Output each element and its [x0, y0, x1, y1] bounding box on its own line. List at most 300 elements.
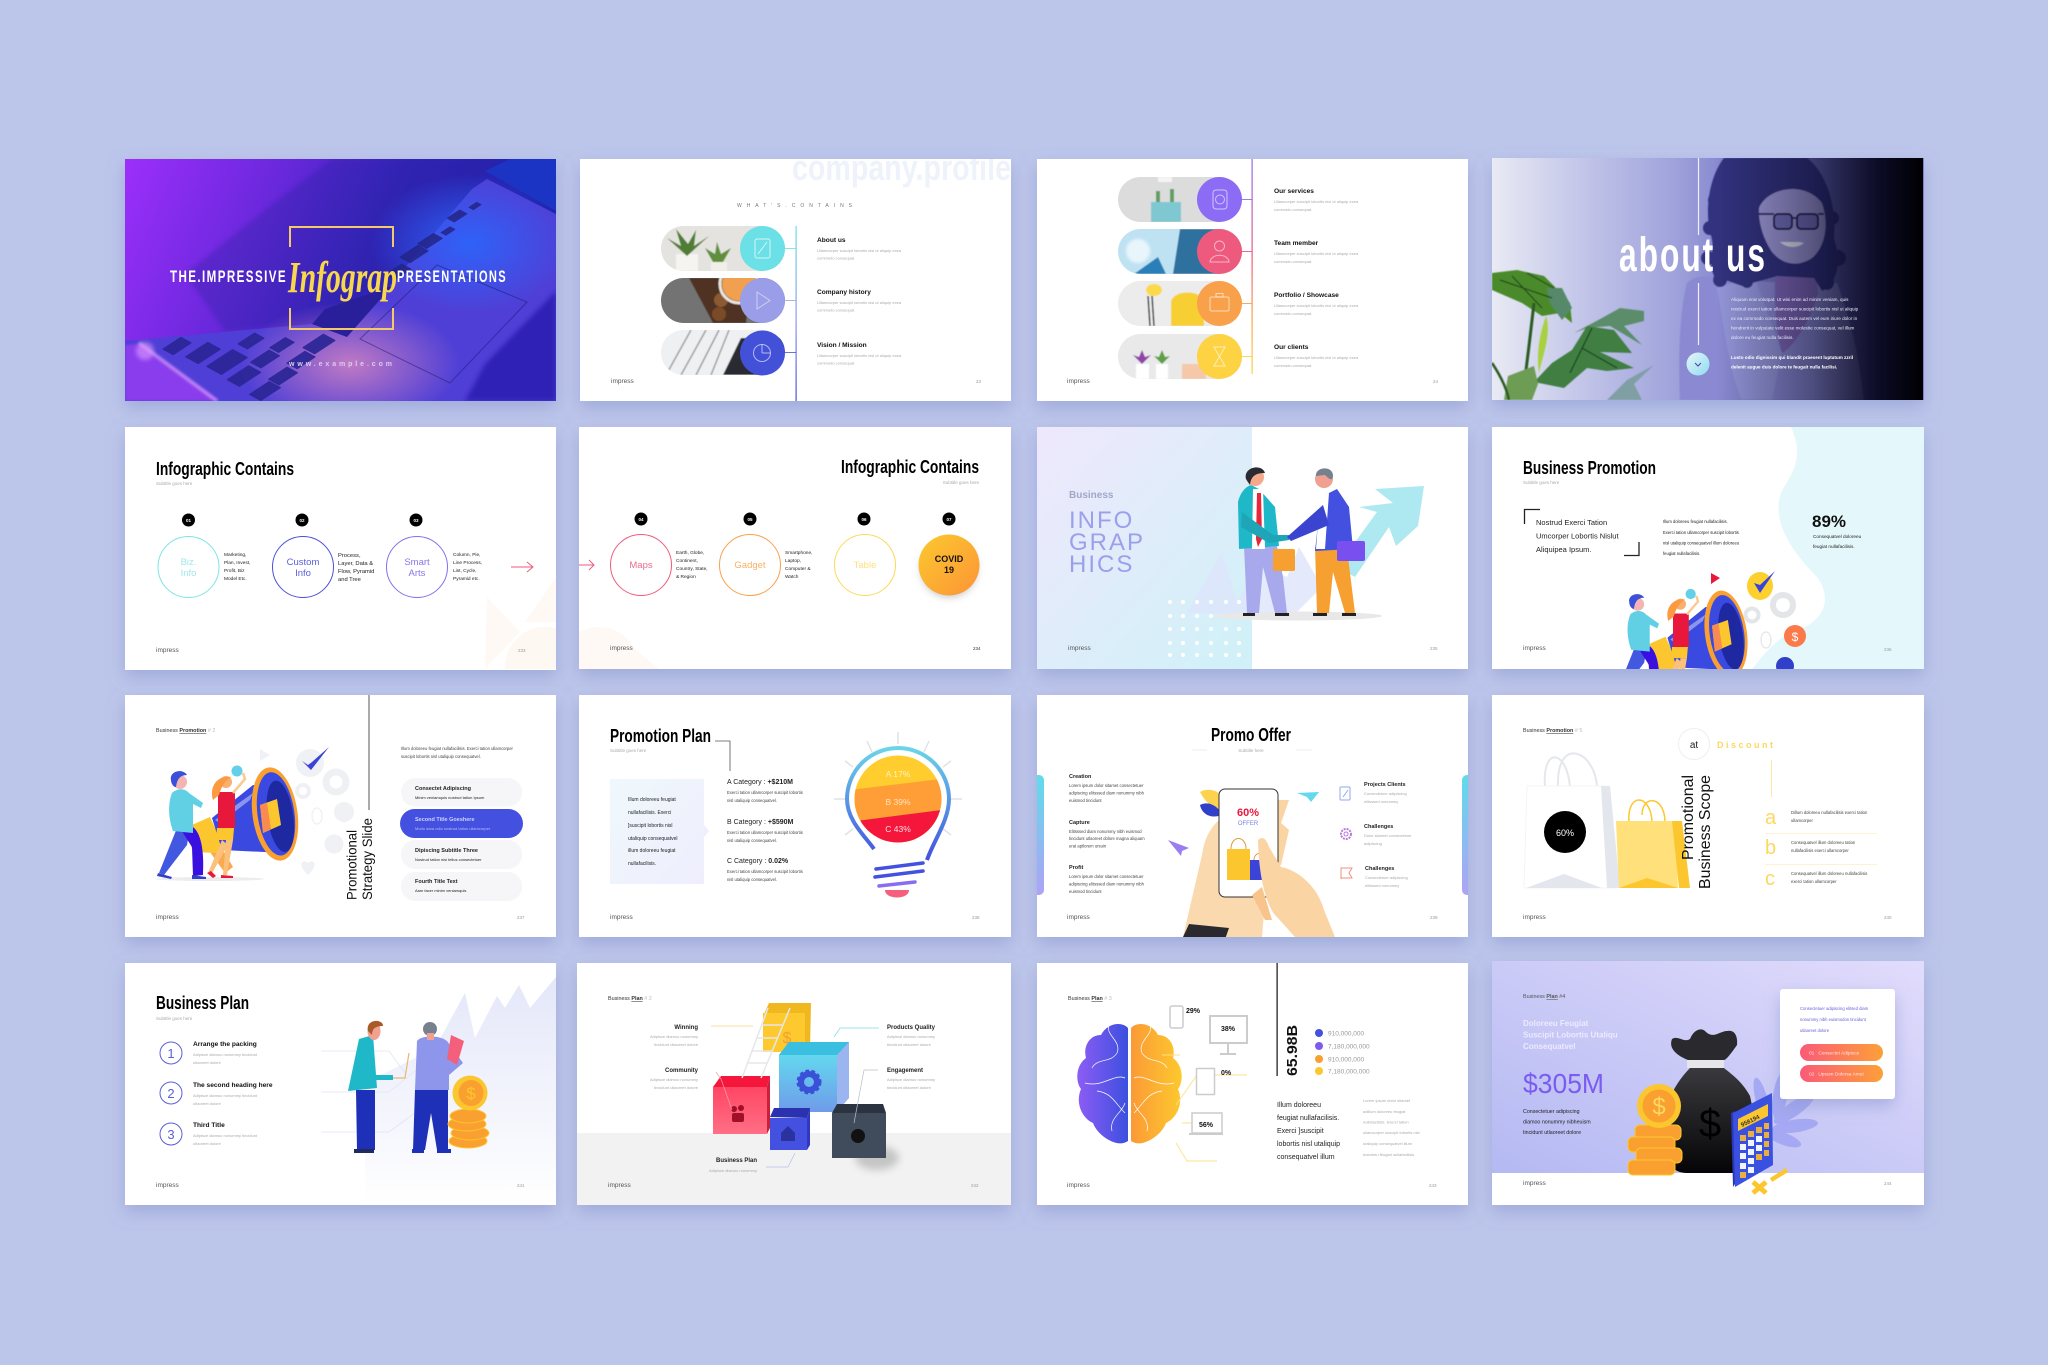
paragraph right: utaliquip consequatvel illum [1363, 1141, 1413, 1146]
cover url: www.example.com [288, 361, 392, 368]
step 06: Table [854, 560, 876, 571]
text box: Illum doloreeu feugiat [628, 797, 676, 803]
step 04 [610, 512, 708, 596]
label products quality: tincidunt utlaoreet dolore [887, 1042, 932, 1047]
step 2: Adipisce diamoo nonummy tincidunt [193, 1093, 258, 1098]
title: Infographic Contains [156, 459, 294, 479]
list items: commodo consequat. [1274, 311, 1312, 316]
paragraph right: nullafacilisis. Exerci tation [1363, 1120, 1409, 1124]
info card [1780, 989, 1895, 1099]
list items: Ullamcorper suscipit lobortis nisl ut aliquip exea [817, 248, 902, 253]
footer: 237 [517, 915, 525, 920]
categories: Exerci tation ullamcorper suscipit lobortis [727, 830, 803, 835]
label community [650, 1068, 699, 1090]
footer: impress [1523, 645, 1547, 652]
footer [156, 1182, 525, 1189]
option pill 3: Dipiscing Subtitle Three [415, 848, 478, 854]
text box: nullafacilisis. [628, 861, 656, 867]
abc list: Dillum doloreeu nullafacilisis exerci tation [1791, 810, 1868, 815]
subheading: Consequatvel [1523, 1042, 1575, 1051]
left list [1069, 774, 1145, 894]
abc list: b [1765, 837, 1776, 859]
illustration: blocks [713, 1003, 899, 1170]
footer: 24 [1433, 379, 1439, 384]
slide 6: infographic contains 2 [574, 427, 1016, 680]
step 2 [160, 1082, 273, 1106]
list items: commodo consequat. [1274, 259, 1312, 264]
connectors [711, 1026, 879, 1167]
option pill 2 [400, 809, 523, 838]
label community: Adipisce diamoo nonummy [650, 1077, 698, 1082]
list items: Our clients [1274, 344, 1309, 351]
abc list: nullafacilisis exerci ullamcorper [1791, 848, 1849, 853]
dot grid [1168, 600, 1241, 657]
title: Subtitle goes here [1523, 480, 1560, 485]
step 3: utlaoreet dolore [193, 1141, 222, 1146]
button 01: 01 Consectet Adipisce [1809, 1050, 1859, 1056]
step 03: Column, Pie, [453, 552, 480, 558]
badge icon [1686, 352, 1710, 376]
text box [610, 779, 709, 884]
device 38%: 38% [1221, 1026, 1236, 1033]
pill: our clients [1116, 332, 1252, 381]
abc list [1765, 807, 1877, 890]
slide 7: business infographics [1037, 427, 1468, 669]
list items: Our services [1274, 188, 1314, 195]
title: Business Promotion [1523, 458, 1656, 478]
gold frame [290, 227, 393, 329]
watermark heading: company.profile [792, 147, 1011, 188]
right list: Dolor sitamet consectetuer [1364, 833, 1412, 838]
rotated total: 65.98B [1284, 1025, 1301, 1076]
paragraph: Consectetuer adipiscing [1523, 1109, 1580, 1115]
discount badge: Discount [1717, 740, 1773, 750]
device 56% [1189, 1113, 1223, 1135]
illustration: megaphone [156, 747, 354, 881]
paragraph: hendrerit in vulputate velit esse molestie consequat, vel illum [1731, 326, 1855, 330]
option pill 3 [401, 840, 522, 869]
label winning: Adipisce diamoo nonummy [650, 1034, 698, 1039]
step 07 covid: COVID [935, 554, 964, 564]
list items: About us [817, 237, 846, 244]
paragraph: delenit augue duis dolore te feugait nulla facilisi. [1731, 364, 1837, 370]
abc list: ullamcorper [1791, 818, 1813, 823]
categories: nisl utaliquip consequatvel. [727, 798, 777, 803]
illustration: phone in hand [1168, 789, 1335, 945]
step 2: 2 [167, 1086, 175, 1101]
left list: euismod tincidunt [1069, 889, 1102, 894]
list items: commodo consequat. [817, 308, 855, 312]
option pill 1 [401, 778, 522, 806]
info card: Consectetuer adipiscing elitsed diam [1800, 1006, 1869, 1011]
step 04: Country, State, [676, 566, 708, 572]
paragraph right: Lorem ipsum dolor sitamet [1363, 1098, 1411, 1103]
rotated heading: Strategy Slide [359, 818, 375, 900]
step 03: 03 [413, 518, 419, 523]
step 05: Smartphone, [785, 550, 812, 556]
right list: elitsssed nonummy [1365, 883, 1399, 888]
paragraph: Exerci tation ullamcorper suscipit lobortis [1663, 530, 1739, 535]
footer [611, 378, 982, 385]
slide 3: services [1037, 159, 1468, 401]
step 01: Marketing, [224, 552, 246, 558]
title: Promo Offer [1211, 725, 1291, 745]
option pill 4 [401, 872, 522, 901]
right list: Consectetuer adipiscing [1364, 791, 1407, 796]
option pill 1: Consectet Adipiscing [415, 786, 471, 792]
illustration: megaphone team [1626, 571, 1806, 669]
title [156, 459, 294, 486]
light bulb chart: B 39% [885, 797, 911, 807]
right list: Challenges [1364, 824, 1393, 830]
step 07 covid [918, 512, 980, 597]
left list: Lorem ipsum dolor sitamet consectetuer [1069, 783, 1144, 788]
paragraph left: Exerci ]suscipit [1277, 1128, 1324, 1135]
list items: Company history [817, 289, 871, 296]
slide 4: about us [1492, 158, 1924, 400]
heading: GRAP [1069, 529, 1145, 556]
step 05: Laptop, [785, 558, 801, 564]
slide 11: promo offer [1037, 695, 1468, 945]
pill: our services [1116, 175, 1252, 224]
vertical line [1276, 963, 1278, 1076]
photo: plant [1492, 270, 1654, 400]
footer [1067, 914, 1438, 921]
step 03: Arts [409, 568, 426, 579]
step 2: The second heading here [193, 1082, 273, 1089]
label business plan [709, 1158, 757, 1173]
footer: 242 [971, 1183, 979, 1188]
cover title: PRESENTATIONS [397, 268, 507, 286]
legend [1315, 1029, 1370, 1076]
pill: vision mission [659, 328, 796, 377]
option pill 1: Minim veniamquis nostrud tation Ipsum [415, 795, 485, 800]
footer: impress [608, 1182, 632, 1189]
step 05: Watch [785, 574, 799, 580]
section label: WHAT'S.CONTAINS [737, 203, 853, 209]
illustration: two men with coins: $ [466, 1084, 476, 1103]
paragraph: dolore eu feugiat nulla facilisis. [1731, 335, 1794, 340]
paragraph right [1363, 1098, 1420, 1157]
footer [156, 914, 525, 921]
paragraph left: consequatvel illum [1277, 1154, 1335, 1161]
label engagement [887, 1068, 935, 1090]
illustration: coins: $ [1652, 1094, 1666, 1120]
step 03: List, Cycle, [453, 568, 476, 574]
footer: impress [1523, 1180, 1547, 1187]
info card: nonummy nibh euismodon tincidunt [1800, 1017, 1867, 1022]
label engagement: Engagement [887, 1068, 923, 1074]
corner decoration [579, 627, 658, 669]
stat: feugiat nullafacilisis. [1813, 544, 1855, 549]
title [156, 993, 249, 1021]
breadcrumb: Business Plan #4 [1523, 994, 1565, 1000]
illustration: shopping bags: 60% [1556, 828, 1574, 838]
abc list: Consequatvel illum doloreeu tation [1791, 840, 1856, 845]
heading: INFO [1069, 507, 1134, 534]
step 04: & Region [676, 574, 696, 580]
legend: 910,000,000 [1328, 1056, 1365, 1064]
step 3 [160, 1122, 258, 1146]
slide 8: business promotion [1492, 427, 1924, 694]
bracket quote: Nostrud Exerci Tation [1536, 518, 1607, 527]
step 06: 06 [861, 517, 867, 522]
paragraph: Aliquam erat volutpat. Ut wisi enim ad minim veniam, quis [1731, 297, 1849, 302]
footer: impress [611, 378, 635, 385]
side tabs [1037, 775, 1468, 895]
right list: Challenges [1365, 866, 1394, 872]
label products quality [887, 1025, 936, 1047]
left list: Profit [1069, 865, 1084, 871]
left list: adipiscing elitsssed diam nonummy nibh [1069, 790, 1145, 796]
vertical line [1698, 158, 1700, 345]
right list: Projects Clients [1364, 782, 1406, 788]
footer [1067, 1182, 1437, 1189]
intro paragraph: Illum doloreeu feugiat nullafacilisis. Exerci tation ullamcorper [401, 746, 514, 751]
list items [817, 237, 902, 366]
categories: C Category : 0.02% [727, 858, 789, 865]
light bulb chart: C 43% [885, 824, 911, 834]
intro paragraph [401, 746, 514, 759]
right list: elitsssed nonummy [1364, 799, 1398, 804]
option pill 4: Fourth Title Text [415, 879, 458, 885]
label winning: tincidunt utlaoreet dolore [654, 1042, 699, 1047]
categories: B Category : +$590M [727, 819, 794, 826]
floor [577, 1133, 1011, 1205]
illustration: money bag: $ [1699, 1102, 1721, 1146]
paragraph right: ullamcorper suscipit lobortis nisl [1363, 1130, 1420, 1135]
label products quality: Products Quality [887, 1025, 936, 1031]
footer [1523, 1180, 1892, 1187]
device 0%: 0% [1221, 1070, 1232, 1077]
rotated heading: Business Scope [1697, 775, 1714, 889]
timeline line [796, 226, 797, 401]
stat: Consequatvel doloreeu [1813, 534, 1862, 539]
paragraph: nostrud exerci tation ullamcorper suscipit lobortis nisl ut aliquip [1731, 306, 1859, 312]
illustration: megaphone team: $ [1792, 630, 1799, 644]
step 02: Layer, Data & [338, 561, 373, 567]
footer: impress [1067, 378, 1091, 385]
paragraph right: adillum doloreeu feugiat [1363, 1109, 1406, 1114]
button 02: 02 Upsum Dolorsa Amet [1809, 1072, 1864, 1078]
list items: Portfolio / Showcase [1274, 292, 1339, 299]
info card: utlaoreet dolore [1800, 1028, 1830, 1033]
rotated heading [1680, 775, 1714, 889]
step 1 [160, 1041, 258, 1065]
footer [1523, 914, 1892, 921]
illustration: brain [1077, 1024, 1182, 1143]
arrow [511, 562, 533, 572]
left list: Capture [1069, 820, 1090, 826]
pill: about us [659, 224, 796, 273]
list items: commodo consequat. [817, 256, 855, 260]
illustration: phone in hand: 60% [1237, 807, 1259, 819]
footer: 235 [1430, 646, 1438, 651]
connectors [1162, 1055, 1247, 1161]
paragraph: nisl utaliquip consequatvel illum doloreeu [1663, 540, 1740, 546]
photo: woman [1679, 158, 1864, 400]
list items: Vision / Mission [817, 342, 867, 349]
step 07 covid: 19 [944, 565, 954, 575]
categories [727, 779, 803, 882]
text box: illum doloreeu feugiat [628, 848, 676, 854]
title: Business Plan [156, 993, 249, 1013]
option pill 2: Modo dara odio nostrud tation ullamcorper [415, 826, 491, 831]
bracket quote: Umcorper Lobortis Nislut [1536, 532, 1619, 540]
left list: adipiscing elitsssed diam nonummy nibh [1069, 882, 1145, 886]
footer [610, 645, 981, 652]
stat: 89% [1812, 512, 1846, 531]
slide 10: promotion plan [579, 695, 1011, 937]
intro paragraph: suscipit lobortis nisl utaliquip consequatvel. [401, 754, 481, 759]
footer: 23 [976, 379, 982, 384]
list items: Ullamcorper suscipit lobortis nisl ut aliquip exea [817, 300, 902, 305]
text box: utaliquip consequatvel [628, 836, 677, 842]
footer [608, 1182, 979, 1189]
discount badge: at [1690, 740, 1698, 751]
pill: portfolio [1116, 279, 1252, 328]
pill: team member [1116, 227, 1252, 276]
illustration: phone in hand: OFFER [1238, 821, 1259, 827]
step 02 [272, 514, 374, 598]
option pill 4: Aam facer minim veniamquis [415, 888, 466, 893]
footer: impress [1523, 914, 1547, 921]
step 01: Info [181, 568, 196, 579]
paragraph: tincidunt utlaoreet dolore [1523, 1130, 1581, 1136]
paragraph: Illum doloreeu feugiat nullafacilisis. [1663, 519, 1728, 524]
illustration: shopping bags [1524, 753, 1690, 888]
device 29% [1170, 1006, 1201, 1028]
illustration: blocks: $ [783, 1030, 792, 1047]
guide lines [321, 1051, 445, 1132]
rotated heading: Promotional [344, 830, 360, 900]
device 56%: 56% [1199, 1122, 1214, 1129]
step 02: and Tree [338, 577, 361, 583]
lilac panel [1492, 961, 1924, 1173]
step 03: Line Process, [453, 560, 482, 566]
chart backdrop [365, 977, 556, 1205]
step 1: utlaoreet dolore [193, 1060, 222, 1065]
heading [1069, 490, 1145, 578]
step 05: 05 [747, 517, 753, 522]
step 04: Earth, Globe, [676, 550, 704, 556]
footer: impress [156, 914, 180, 921]
step 05 [720, 512, 812, 596]
step 06 [834, 512, 896, 596]
right list [1340, 782, 1412, 888]
footer: 243 [1429, 1183, 1437, 1188]
paragraph left: lobortis nisl utaliquip [1277, 1141, 1340, 1148]
list items: commodo consequat. [1274, 363, 1312, 368]
step 01: Model Etc. [224, 576, 247, 582]
label community: Community [665, 1068, 699, 1074]
step 3: 3 [167, 1127, 175, 1142]
corner sun decoration [485, 578, 556, 669]
text box: nullafacilisis. Exerci [628, 810, 671, 816]
slide 16: money bag [1492, 961, 1924, 1205]
timeline line [1252, 159, 1253, 374]
label products quality: Adipisce diamoo nonummy [887, 1034, 935, 1039]
footer: impress [156, 1182, 180, 1189]
step 02: Info [295, 568, 311, 579]
footer: 236 [1884, 647, 1892, 652]
paragraph left: Illum doloreeu [1277, 1102, 1321, 1109]
slide 15: business plan brain [1037, 963, 1468, 1205]
connector [715, 741, 730, 771]
title [610, 726, 711, 753]
title: Subtitle goes here [610, 748, 647, 753]
list items: Ullamcorper suscipit lobortis nisl ut aliquip exea [1274, 199, 1359, 204]
footer [1068, 645, 1438, 652]
left list: Creation [1069, 774, 1092, 780]
list items: Ullamcorper suscipit lobortis nisl ut aliquip exea [817, 353, 902, 358]
vertical accent [1771, 760, 1772, 797]
legend: 7,180,000,000 [1328, 1068, 1370, 1076]
subheading [1523, 1019, 1618, 1051]
paragraph right: doloreeu feugiat nullafacilisis. [1363, 1152, 1415, 1157]
heading: about us [1619, 229, 1767, 282]
title: Subtitle goes here [156, 1016, 193, 1021]
slide 9: promotional strategy [125, 695, 556, 937]
slide 14: business plan blocks [577, 963, 1011, 1205]
illustration: calculator [1731, 1093, 1787, 1193]
label engagement: tincidunt utlaoreet dolore [887, 1085, 932, 1090]
step 03: Smart [404, 557, 430, 568]
paragraph: ex ea commodo consequat. Duis autem vel eum iriure dolor in [1731, 316, 1858, 321]
abc list: Consequatvel illum doloreeu nullafacilisis [1791, 871, 1867, 876]
step 01: Profit, Biz [224, 568, 245, 574]
left list: tincidunt utlaoreet dolore magna aliquam [1069, 836, 1145, 841]
left list: Elitsssed diam nonummy nibh euismod [1069, 829, 1142, 834]
slide 12: promotional business scope [1492, 695, 1924, 937]
legend: 7,180,000,000 [1328, 1044, 1370, 1050]
list items: commodo consequat. [1274, 207, 1312, 212]
footer: impress [610, 645, 634, 652]
step 02: Flow, Pyramid [338, 569, 374, 575]
abc list: exerci tation ullamcorper [1791, 879, 1837, 884]
footer [156, 647, 526, 654]
title: Infographic Contains [841, 457, 979, 477]
device 29%: 29% [1186, 1008, 1201, 1015]
categories: Exerci tation ullamcorper suscipit lobortis [727, 790, 803, 795]
step 03 [386, 514, 482, 598]
step 04: Continent, [676, 558, 698, 564]
paragraph left: feugiat nullafacilisis. [1277, 1115, 1339, 1122]
footer: 244 [1884, 1181, 1892, 1186]
illustration: handshake [1214, 467, 1382, 620]
light bulb chart [834, 732, 962, 898]
paragraph left [1277, 1102, 1340, 1161]
paragraph: diamoo nonummy nibheuism [1523, 1120, 1591, 1126]
leaf decoration [1750, 1071, 1819, 1151]
cyan wave panel [1752, 427, 1924, 669]
paragraph [1731, 297, 1859, 370]
right list: Consectetuer adipiscing [1365, 875, 1408, 880]
step 02: Custom [287, 557, 319, 568]
stat [1812, 512, 1862, 549]
footer: impress [1068, 645, 1092, 652]
title [841, 457, 979, 485]
step 2: utlaoreet dolore [193, 1101, 222, 1106]
footer: 241 [517, 1183, 525, 1188]
list items: Ullamcorper suscipit lobortis nisl ut aliquip exea [1274, 303, 1359, 308]
list items: Ullamcorper suscipit lobortis nisl ut aliquip exea [1274, 355, 1359, 360]
title: Subtitle here [1238, 748, 1264, 753]
breadcrumb: Business Plan # 2 [608, 996, 652, 1002]
slide 1: cover [125, 159, 570, 426]
rotated heading [344, 818, 375, 900]
label business plan: Business Plan [716, 1158, 757, 1164]
